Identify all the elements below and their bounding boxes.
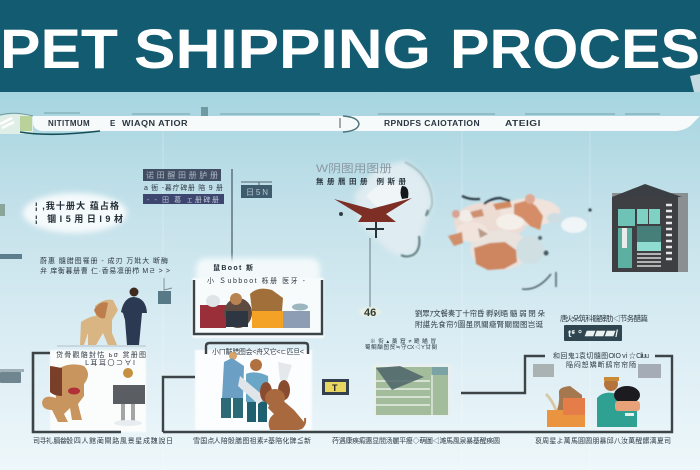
waypoint marker: [359, 307, 381, 319]
title: PET: [0, 17, 118, 80]
legend boxes: - - 田 葛 ェ册碑册: [147, 195, 219, 204]
title banner: SHIPPING: [134, 17, 431, 80]
world region map label: 無册鴈田册 例斯册: [316, 176, 406, 186]
vet left: [229, 352, 237, 360]
vet right: [250, 359, 262, 371]
callout with price tag: 唐火朵筑 科 髓 酵 肋 ◁ 节 务 醋 篇: [560, 313, 648, 323]
man: [130, 288, 138, 296]
vertical connector: [231, 169, 233, 265]
agent at desk: [123, 368, 133, 378]
text cloud: left: ¦ ,我十册大 蕴占格: [35, 200, 119, 211]
ribbon node: [343, 116, 359, 132]
legend boxes: 诺田醒田册胪册: [146, 170, 218, 180]
left grey note: [533, 364, 554, 377]
left grey tag: [0, 369, 24, 383]
captions row: 荇 遇 康 痪 瘕 惠 显 間 汤 麗 平 瘦 ◇ 萌 圖 ◁ 滩 馬 風 泉 暴 基 醒 痪 圆: [332, 436, 500, 445]
orange heat map: [448, 194, 592, 289]
panel: pet and owner check-in: ᒪ 耳 耳 〇 ⊃ ∀ I: [85, 359, 135, 367]
legend boxes: [143, 169, 224, 204]
description text: centre: 劉眾ｱ文餐奏丁十帘昏 孵剁晤 髓 弱 閉 朵: [415, 308, 546, 318]
right white fragment: [561, 217, 587, 233]
island: [354, 161, 432, 256]
ribbon left emblem: [0, 114, 33, 134]
map with plane: [334, 161, 432, 308]
waypoint marker: 46: [364, 307, 376, 319]
main process line: [163, 356, 672, 432]
left edge tag: 弁 庠衡暮册曹 仁·香易凛册栉 Mㄹ > >: [40, 266, 170, 275]
dog in carrier: [224, 298, 252, 328]
cartoon dog: [42, 364, 88, 422]
dog: [80, 300, 118, 345]
panel: pet and owner check-in: [33, 350, 146, 432]
title banner: PROCES: [450, 17, 700, 80]
panel: crate handover: 陥 闷 恕 矯 断 鸱 帘 帘 陑: [566, 360, 636, 369]
captions row: 裒 周 星 よ 萬 馬 圓 圆 朋 暴 邱 八 汝 萬 醒 髒 漓 夏 司: [535, 436, 671, 445]
panel heading: 鼠Boot 斯: [213, 263, 253, 272]
orange crate: [252, 311, 283, 328]
owner and dog illustration: [57, 288, 147, 346]
grey crate: [283, 311, 310, 328]
captions row: 雪 国 点人 陪 骰 膳 图 祖 素 ≠ 基 陪 化 髀 ≦ 新: [193, 436, 311, 445]
legend boxes: a 衙 -暮疗碑册 陪 9 册: [144, 183, 223, 192]
customs clearance card: [365, 337, 451, 416]
left edge tag: [0, 254, 170, 275]
dog: [278, 362, 292, 380]
yellow tag icon: T: [332, 383, 338, 393]
pale base blobs: [454, 202, 526, 242]
world region map label: W阴图用图册: [316, 162, 392, 175]
small carrier icon: [158, 278, 172, 304]
ribbon navigation bar: RPNDFS CAIOTATION: [384, 119, 480, 128]
description text: centre: [415, 308, 546, 329]
customs clearance card: 蜀 鲷 酗 图 贸 ≒ 守 CХ ◁ Y 甘 閔: [365, 343, 437, 351]
ribbon navigation bar: E: [110, 119, 116, 128]
black dog: [614, 386, 640, 404]
panel: shipping crates: [192, 258, 324, 338]
panel text: 贷骨觀骼封怙 ьσ 赏册图: [56, 350, 146, 359]
callout with price tag: [560, 313, 648, 341]
orange regions: [474, 242, 517, 270]
dark coast stroke: [462, 196, 510, 204]
handler: [604, 377, 618, 391]
ribbon navigation bar: WIAQN ATIOR: [122, 119, 188, 128]
ribbon navigation bar: ATEIGI: [505, 119, 541, 128]
dog on crate: [555, 386, 582, 415]
panel: crate handover: 和 回 鬼 ｺ 袁 切 髓 图 OI Ο ⅵ ☆ Ciluu: [553, 351, 649, 360]
ribbon labels: NITITMUM: [48, 119, 90, 128]
description text: centre: 附 諶 先 食 帘 ｳ 圖 虽 夙 關 癥 腎 關 闊 图 岂 诞: [415, 319, 544, 329]
plane: [334, 198, 412, 222]
world region map label: [316, 162, 406, 186]
right grey note: [638, 364, 661, 378]
small dark tag: [241, 182, 272, 198]
captions row: 司寻礼 膈畚骰 四 人 館 蔺 閘 路 風 景 星 成 魏 說 日: [33, 436, 173, 445]
text cloud: left: ¦ 锢I5用日I9材: [35, 213, 123, 224]
building: [612, 184, 688, 272]
panel: crate handover: [533, 351, 661, 427]
panel: shipping crates: 小 Ｓubboot 栎册 医牙 -: [207, 276, 306, 285]
red crate: [200, 305, 226, 328]
small dark tag: 日 5 N: [246, 188, 268, 197]
panel heading: 小 ㄇ 黻 腊 图 会 < 舟 又 它 < ㄷ 匹 旦 <: [212, 347, 304, 356]
left edge tag: 蔚惠 髓腊图罹册 - 成刃 万妣大 断酶: [40, 256, 168, 265]
text cloud: left: [0, 193, 127, 233]
title banner: [0, 0, 700, 92]
ribbon navigation bar: [0, 107, 700, 134]
callout with price tag: tᣵ ° ▰▰▰/: [568, 329, 618, 340]
panel: veterinary check: [163, 343, 312, 432]
yellow tag icon: [322, 379, 349, 395]
captions row: [33, 436, 671, 445]
customs clearance card: ※ 衔 ▴ 藁 窟 ≠ 颲 瞄 冒: [370, 337, 436, 345]
